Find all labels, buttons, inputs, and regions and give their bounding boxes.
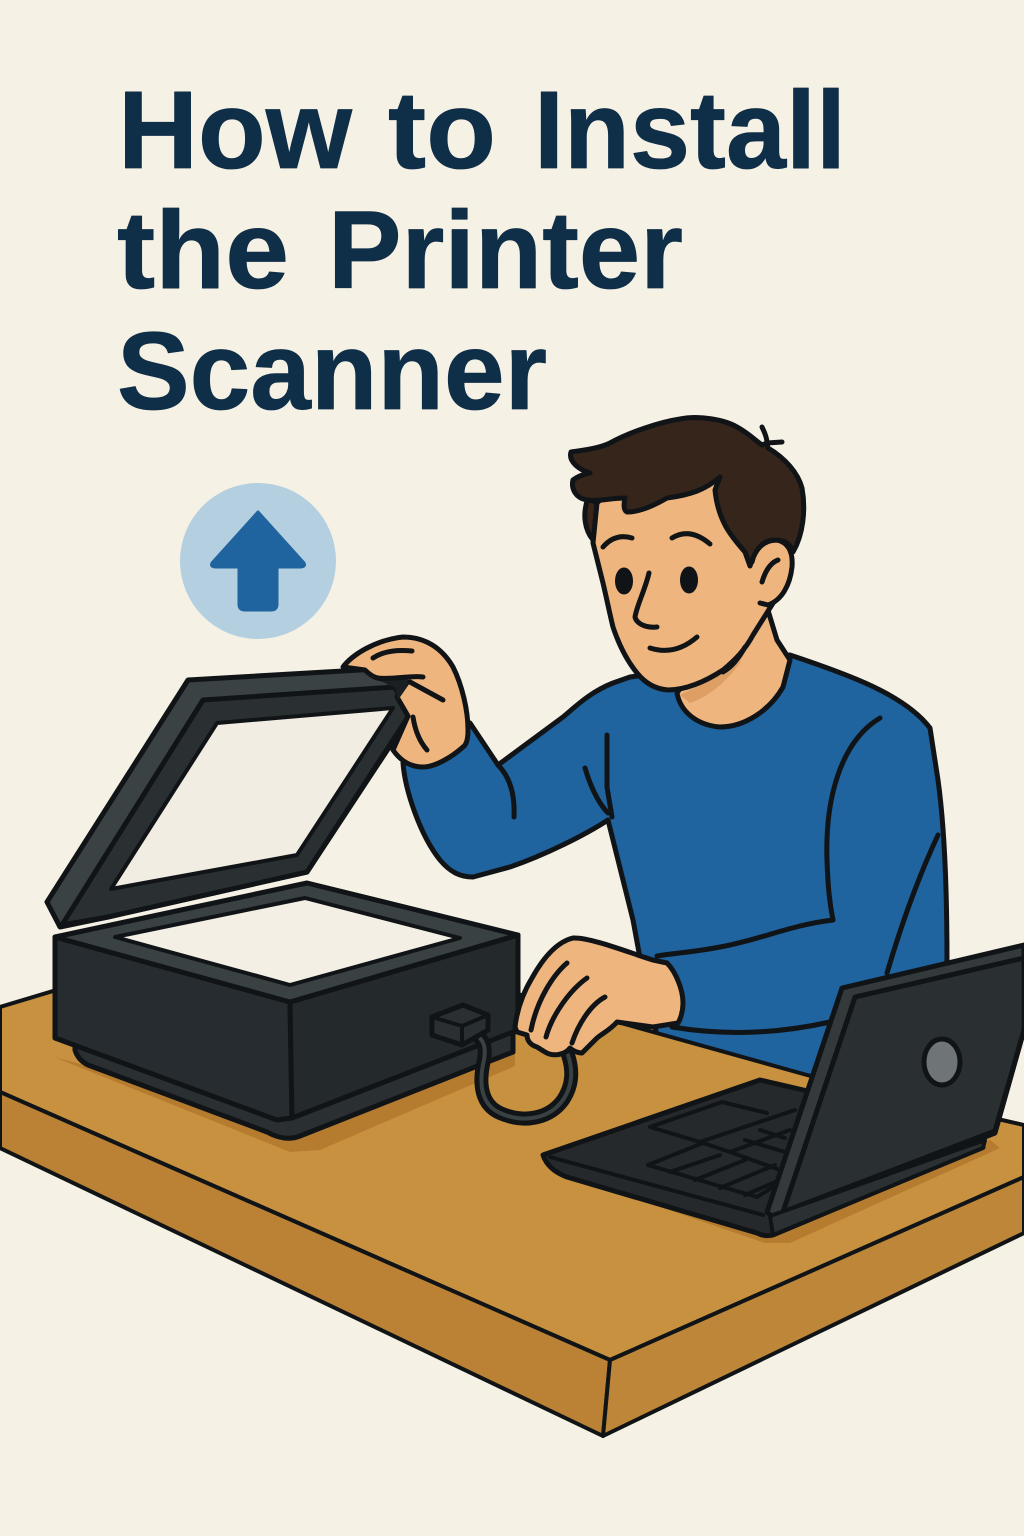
scanner: connector bbox=[432, 1005, 488, 1045]
laptop: trackpad bbox=[650, 1102, 795, 1142]
person: sleeve folds bbox=[498, 765, 514, 817]
person: head bbox=[571, 418, 804, 690]
laptop: bottom edge bbox=[770, 1140, 985, 1235]
title: Scanner bbox=[117, 310, 547, 433]
person: hair bbox=[571, 418, 804, 566]
laptop: base bbox=[543, 1080, 983, 1236]
laptop: screen back bbox=[767, 945, 1024, 1218]
person: upper hand bbox=[343, 637, 468, 767]
laptop bbox=[543, 945, 1024, 1236]
scanner bbox=[47, 668, 571, 1138]
scanner: base front right bbox=[290, 935, 518, 1118]
desk: right side bbox=[603, 1177, 1024, 1436]
person: sweater bbox=[403, 655, 947, 1090]
person: hair tuft bbox=[762, 427, 782, 443]
title bbox=[117, 69, 846, 433]
scanner: base front left bbox=[55, 937, 292, 1120]
shadows on desk bbox=[54, 1050, 1000, 1243]
title: to bbox=[388, 69, 496, 192]
desk bbox=[0, 925, 1024, 1436]
scanner: base top bbox=[55, 883, 518, 1002]
person: neck bbox=[677, 607, 790, 727]
title: How bbox=[118, 69, 352, 192]
laptop: keyboard bbox=[648, 1130, 790, 1197]
person: grip shadow bbox=[370, 676, 412, 700]
scanner: lid inner band bbox=[62, 687, 408, 925]
person: lower hand bbox=[515, 938, 683, 1055]
person: back hair bbox=[585, 498, 600, 540]
person: facial features bbox=[603, 534, 745, 672]
person: ear bbox=[752, 540, 792, 605]
title: Printer bbox=[328, 189, 683, 312]
desk: left side bbox=[0, 1092, 610, 1436]
scanner: lid opening bbox=[111, 708, 393, 889]
person: face bbox=[593, 470, 790, 690]
scanner: plinth bbox=[75, 1030, 513, 1138]
icon: upload arrow bbox=[180, 483, 336, 639]
title: Install bbox=[534, 69, 846, 192]
title: the bbox=[117, 189, 289, 312]
laptop: logo bbox=[924, 1039, 960, 1085]
desk: top bbox=[0, 925, 1024, 1360]
scanner: lid outer bbox=[47, 668, 417, 927]
person: neck shadow bbox=[680, 660, 742, 703]
laptop: screen panel bbox=[783, 958, 1024, 1212]
scanner: cable bbox=[473, 1032, 571, 1119]
scanner: glass bbox=[115, 898, 460, 985]
person: torso and arms bbox=[403, 607, 947, 1090]
